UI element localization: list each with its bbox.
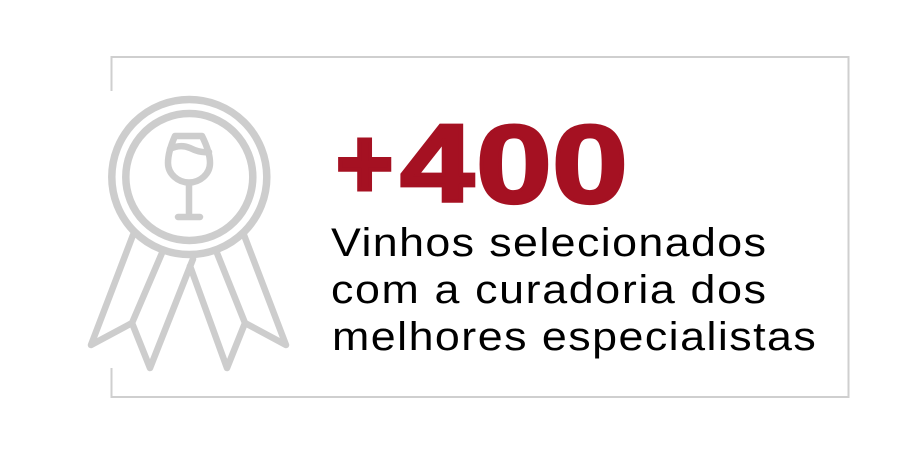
right ribbon [190,235,286,368]
medal inner ring [126,114,253,240]
description text [331,220,816,358]
headline number [336,101,628,227]
icon: award rosette with wine glass [91,100,286,368]
digit 0 second: 0 [552,103,628,227]
digit 0: 0 [476,103,552,227]
digit 4: 4 [400,101,474,225]
frame: open-sided border [112,57,848,397]
wine glass [168,136,210,217]
line 1: Vinhos selecionados [331,220,766,264]
plus sign: + [336,108,393,218]
left ribbon [91,235,193,368]
line 3: melhores especialistas [332,314,816,358]
line 2: com a curadoria dos [331,267,766,311]
medal outer ring [112,100,267,254]
